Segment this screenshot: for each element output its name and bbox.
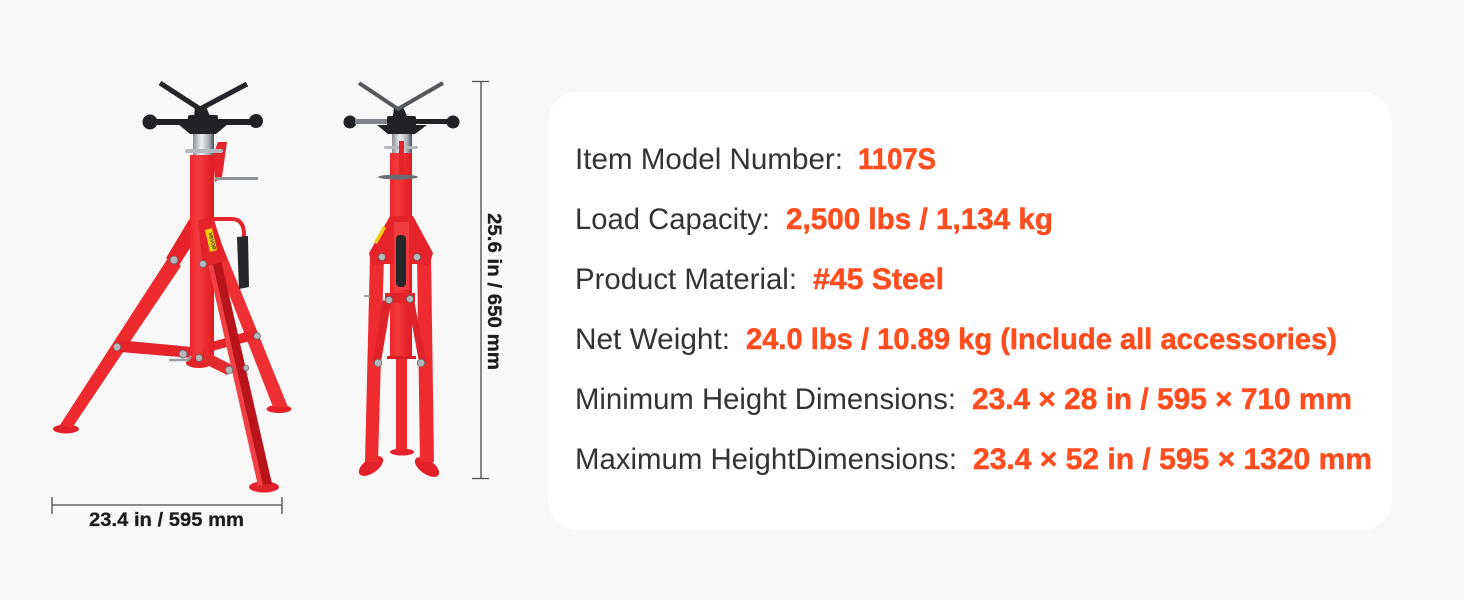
rubber grip: [237, 236, 249, 289]
dimension: height: [472, 81, 504, 479]
yellow label: [374, 226, 386, 244]
rear right brace: [212, 329, 258, 351]
centre rod: [396, 355, 407, 451]
locking pin: [215, 177, 258, 180]
spec: minimum height dimensions: [575, 383, 1352, 416]
front leg: [207, 260, 272, 486]
front plate: [198, 217, 227, 268]
bolts: [374, 253, 425, 367]
lower collar: [387, 356, 416, 359]
latch: [399, 141, 404, 176]
centre column: [390, 153, 412, 357]
head crossbar: [344, 107, 460, 134]
silver sleeve: [392, 128, 412, 153]
front leg shaded face: [212, 260, 272, 485]
spec: load capacity: [575, 203, 1053, 236]
dimension: width: 23.4 in / 595 mm: [89, 510, 244, 531]
gussets: [166, 218, 190, 267]
left leg: [60, 258, 181, 428]
left leg: [365, 255, 384, 462]
silver sleeve: [193, 128, 214, 155]
right leg: [417, 255, 434, 462]
wing bolt: [169, 356, 191, 360]
spec: item model number: Item Model Number:: [575, 143, 843, 176]
panel: specifications card: [548, 92, 1392, 530]
spec: minimum height dimensions: Minimum Height Dimensions:: [575, 383, 956, 416]
centre column: [190, 155, 214, 362]
spec: maximum height dimensions: 23.4 × 52 in / 595 × 1320 mm: [973, 443, 1372, 476]
feet: [356, 448, 442, 481]
light channel: [394, 222, 409, 290]
product: pipe stand, angled view: [53, 83, 292, 492]
locking pin end: [364, 295, 370, 297]
washer: [185, 149, 223, 153]
rubber grip: [396, 235, 406, 287]
front brace: [201, 350, 232, 375]
handle arm: [214, 219, 244, 238]
feet: [53, 405, 292, 492]
latch: [213, 142, 227, 182]
washer: [384, 146, 418, 149]
spec: load capacity: 2,500 lbs / 1,134 kg: [786, 203, 1053, 236]
spec: net weight: 24.0 lbs / 10.89 kg (Include all accessories): [746, 323, 1337, 356]
gusset: [369, 216, 433, 266]
locking disc: [378, 175, 418, 179]
dimension: height: 25.6 in / 650 mm: [483, 213, 504, 370]
spec: product material: [575, 263, 944, 296]
spec: maximum height dimensions: [575, 443, 1372, 476]
upper collar: [385, 293, 415, 303]
inner braces: [373, 300, 391, 362]
yellow label: [205, 228, 217, 252]
yellow label: VEVOR: [207, 232, 217, 251]
spec: maximum height dimensions: Maximum HeightDimensions:: [575, 443, 957, 476]
column base: [186, 358, 212, 368]
V saddle: [160, 83, 247, 109]
rear right leg: [208, 240, 288, 407]
spec: product material: Product Material:: [575, 263, 797, 296]
spec: product material: #45 Steel: [813, 263, 944, 296]
spec: load capacity: Load Capacity:: [575, 203, 770, 236]
bolts: [113, 256, 260, 374]
V saddle: [359, 83, 443, 109]
cross brace: [118, 340, 192, 358]
spec: net weight: Net Weight:: [575, 323, 730, 356]
spec: minimum height dimensions: 23.4 × 28 in / 595 × 710 mm: [972, 383, 1352, 416]
spec: item model number: 1107S: [858, 143, 936, 176]
head crossbar: [142, 107, 263, 134]
dimension: width: [52, 497, 282, 531]
product: pipe stand, side view: [344, 83, 460, 481]
